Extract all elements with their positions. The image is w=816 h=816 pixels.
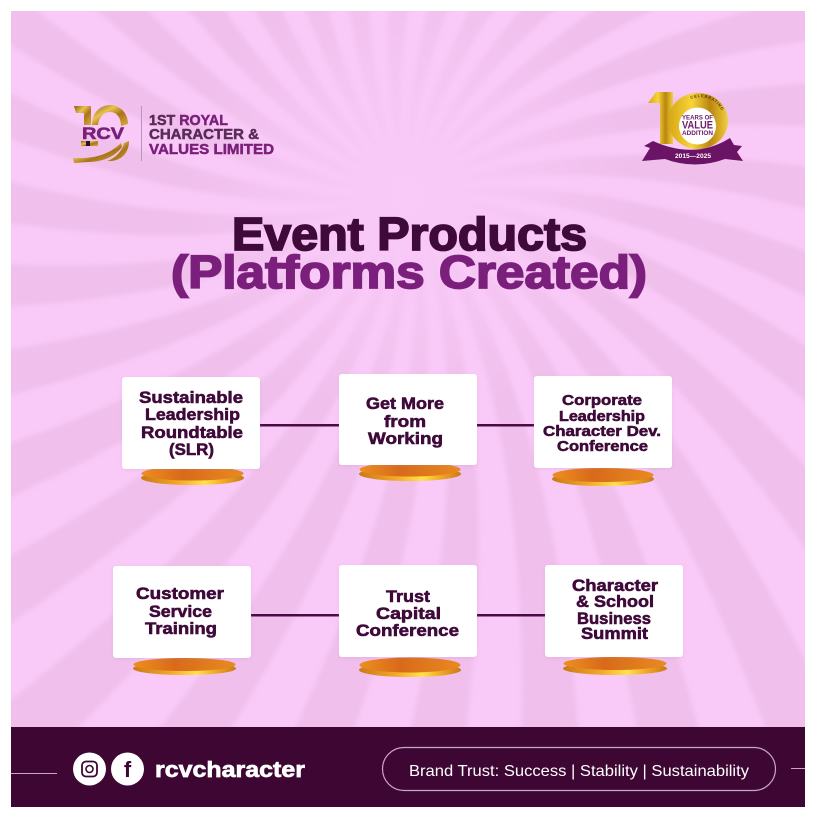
logo letters RCV: RCV — [82, 124, 125, 143]
card label: & School — [576, 592, 654, 611]
card label: Roundtable — [141, 423, 243, 442]
card label: Customer — [136, 584, 224, 603]
card: Trust Capital Conference — [339, 565, 477, 677]
gold pedestal — [359, 658, 461, 677]
card label: Leadership — [145, 405, 240, 424]
logo wordmark: VALUES LIMITED — [149, 141, 274, 158]
card label — [139, 388, 243, 459]
logo: RCV 10th anniversary company logo — [73, 105, 274, 163]
card label: Capital — [376, 604, 441, 623]
card label: Get More — [366, 394, 444, 413]
card label: from — [384, 412, 426, 431]
card label: Character Dev. — [543, 423, 661, 440]
card label: Character — [572, 576, 658, 595]
badge: 10 years of value addition — [642, 92, 743, 164]
badge ribbon years: 2015—2025 — [675, 153, 711, 160]
gold pedestal — [141, 466, 244, 485]
icon: facebook — [111, 752, 144, 786]
social handle: rcvcharacter — [155, 757, 305, 782]
card label: Working — [368, 429, 443, 448]
title line two: (Platforms Created) — [171, 246, 647, 298]
logo wordmark: 1ST ROYAL — [149, 112, 228, 129]
card label — [356, 587, 459, 640]
gold pedestal — [552, 468, 654, 486]
card label — [543, 392, 661, 455]
card: Customer Service Training — [113, 566, 251, 675]
badge inner text: ADDITION — [682, 130, 713, 137]
card label: Business — [577, 609, 651, 628]
card label — [366, 394, 444, 448]
gold pedestal — [133, 658, 236, 675]
card: Get More from Working — [339, 374, 477, 481]
badge gold numeral one — [648, 92, 673, 144]
card label: (SLR) — [169, 440, 214, 459]
badge inner text — [682, 114, 713, 137]
card label: Trust — [386, 587, 430, 606]
card label: Sustainable — [139, 388, 243, 407]
badge gold ring — [668, 93, 728, 149]
badge arc text: CELEBRATING — [690, 94, 724, 110]
badge ribbon — [642, 138, 743, 164]
tagline pill: Brand Trust: Success | Stability | Sustainability — [409, 763, 749, 780]
icon: facebook: f — [124, 757, 132, 782]
gold pedestal — [563, 657, 667, 675]
card label: Summit — [581, 624, 648, 643]
card label: Leadership — [559, 408, 645, 425]
logo emblem: gold 10 with RCV — [73, 105, 129, 163]
card label — [572, 576, 658, 643]
title line one: Event Products — [232, 208, 587, 260]
card label: Conference — [356, 621, 459, 640]
tagline pill — [382, 748, 776, 790]
footer bar — [11, 727, 805, 807]
badge inner text: VALUE — [682, 120, 713, 132]
icon: instagram — [73, 752, 106, 786]
card label: Corporate — [562, 392, 642, 409]
card label — [136, 584, 224, 638]
badge inner text: YEARS OF — [682, 114, 713, 122]
card label: Service — [149, 602, 212, 621]
card label: Conference — [557, 438, 648, 455]
connectors between cards — [251, 424, 545, 616]
card: Sustainable Leadership Roundtable — [122, 377, 260, 485]
card: Corporate Leadership Character Dev. Conference — [534, 376, 672, 486]
gold pedestal — [359, 462, 461, 481]
logo wordmark — [149, 112, 274, 158]
card label: Training — [145, 619, 217, 638]
card: Character & School Business Summit — [545, 565, 683, 675]
logo wordmark: CHARACTER & — [149, 126, 259, 143]
title — [171, 208, 647, 298]
